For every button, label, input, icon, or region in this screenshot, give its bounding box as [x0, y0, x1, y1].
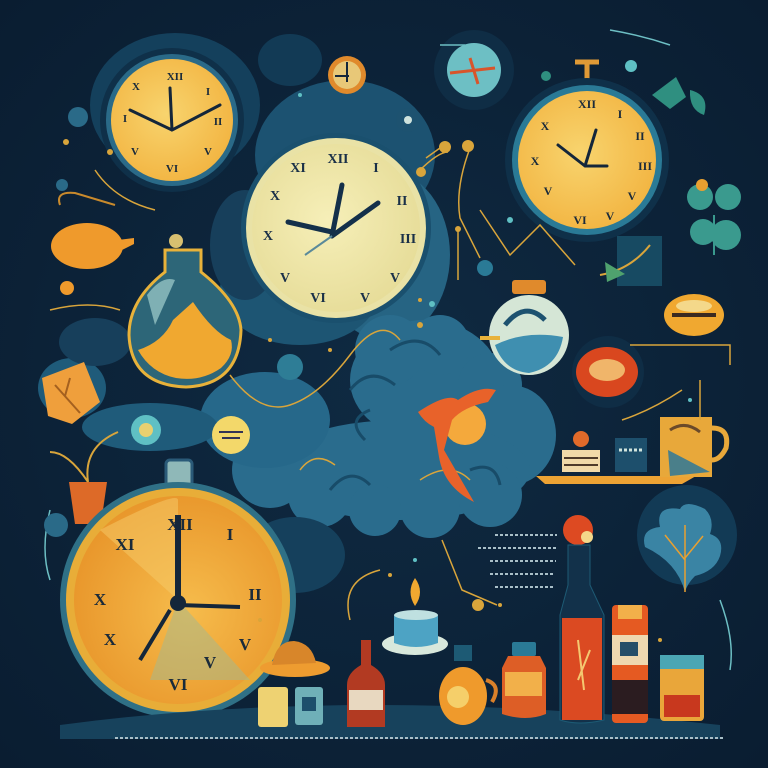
orange teapot jar — [439, 645, 496, 725]
plant pot — [50, 432, 118, 524]
clock: top left: V — [131, 146, 139, 158]
clock: top right: X — [531, 154, 540, 168]
clock: top left: V — [204, 146, 212, 158]
cloud: main figure cloud — [38, 315, 556, 593]
clock: top left: I — [123, 113, 127, 125]
clock: bottom left: XI — [116, 535, 135, 554]
icon: small eye dot — [396, 108, 420, 132]
clock: central: V — [360, 291, 370, 306]
clock: top right: V — [628, 189, 637, 203]
clock: top right: XII — [578, 97, 596, 111]
clock: top right: I — [618, 107, 623, 121]
clock: bottom left: XII — [167, 515, 193, 534]
glowing nodes — [131, 354, 303, 454]
clock: bottom left: X — [104, 630, 117, 649]
clock: central: X — [270, 189, 280, 204]
clock: central: I — [373, 161, 379, 176]
clock: bottom left: X — [94, 590, 107, 609]
icon: small teal clock — [434, 30, 514, 110]
clock: bottom left: I — [227, 525, 234, 544]
clock: top left: X — [132, 81, 140, 93]
clock: central: XII — [327, 152, 349, 167]
clock: top left: XII — [167, 71, 183, 83]
jar medium — [502, 642, 546, 718]
candle — [382, 578, 448, 655]
clock: central: XI — [290, 161, 306, 176]
clock: top left: VI — [166, 163, 178, 175]
picture frame — [600, 236, 662, 286]
cloud swirl lines — [300, 341, 500, 490]
clock: bottom left — [60, 460, 296, 718]
clock: top right: VI — [573, 213, 587, 227]
shelf with cups — [536, 417, 727, 484]
red bottle small — [347, 640, 385, 727]
clock: top right: II — [635, 129, 645, 143]
orange figure — [418, 389, 496, 502]
clock: bottom left: II — [248, 585, 262, 604]
clock: top right: V — [606, 209, 615, 223]
box bottle — [612, 605, 648, 723]
hat — [260, 641, 330, 677]
clock: central: X — [263, 229, 273, 244]
clock: central: V — [390, 271, 400, 286]
clock: top right — [505, 60, 669, 242]
table — [60, 705, 725, 739]
clock: top left: I — [206, 86, 210, 98]
clock: central — [241, 133, 431, 323]
icon: small orange clock — [328, 56, 366, 94]
connector lines and dots — [45, 30, 731, 670]
flask — [129, 250, 241, 387]
text lines — [478, 535, 558, 587]
clock: top left: II — [214, 116, 222, 128]
jar: red bowl — [572, 336, 644, 408]
clock: central: II — [397, 194, 407, 209]
clock: top left — [100, 48, 244, 192]
clock: bottom left: V — [239, 635, 252, 654]
clock: top right: X — [541, 119, 550, 133]
leaf card — [42, 362, 100, 424]
teapot — [51, 193, 183, 295]
clock: top right: V — [544, 184, 553, 198]
burger — [664, 294, 724, 336]
clover plant — [687, 179, 741, 255]
clock: central: VI — [310, 291, 326, 306]
jar: landscape — [480, 280, 569, 375]
clock: central: III — [400, 232, 416, 247]
tall bottle — [560, 515, 604, 723]
leaves: top right — [541, 60, 705, 115]
clock: central: V — [280, 271, 290, 286]
tree leaf — [637, 485, 737, 592]
cloud: upper central — [90, 33, 450, 345]
clock: bottom left: VI — [169, 675, 188, 694]
small jars — [258, 687, 323, 727]
clock: top right: III — [638, 159, 652, 173]
clock: bottom left: V — [204, 653, 217, 672]
scattered dots — [63, 139, 662, 642]
glass — [660, 655, 704, 721]
